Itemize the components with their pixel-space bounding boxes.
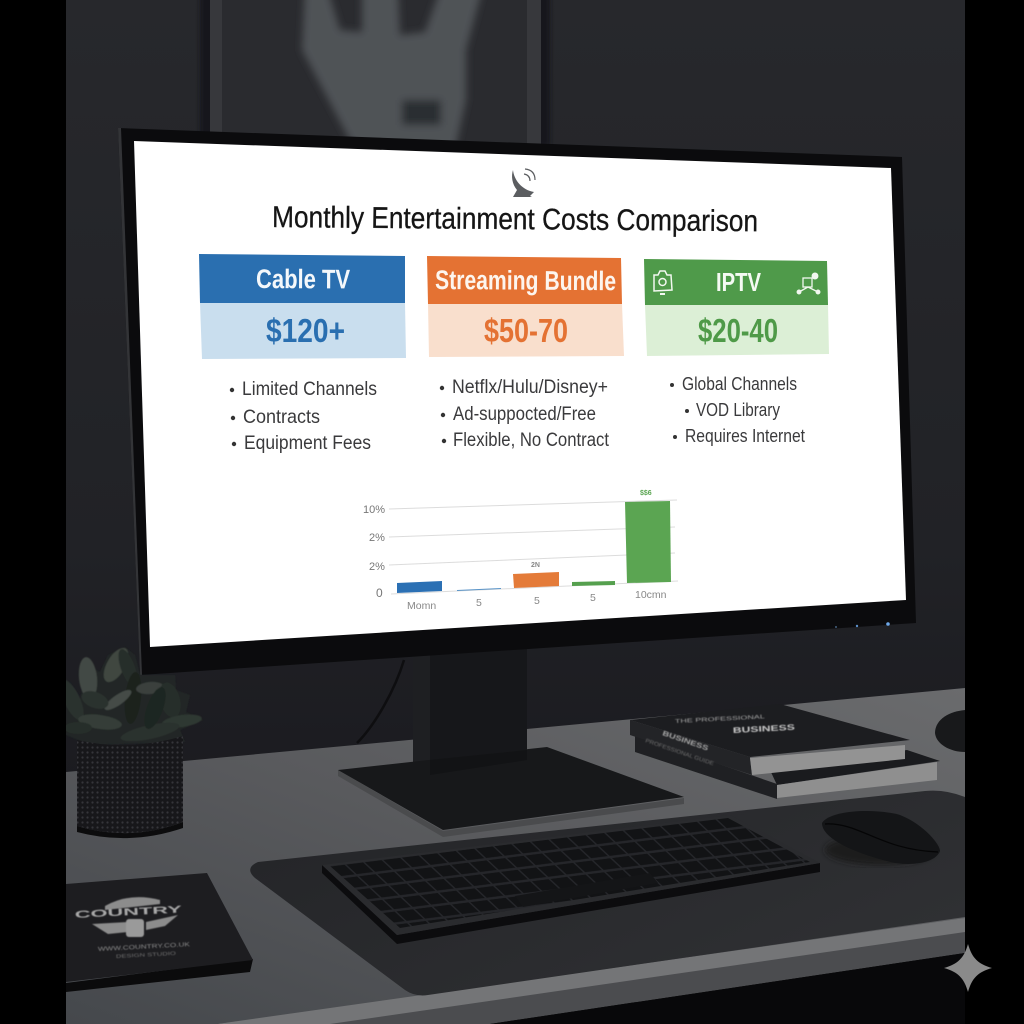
chart x-axis labels: 5 xyxy=(534,595,540,607)
Cable TV price: $120+ xyxy=(266,312,345,349)
book cover text xyxy=(644,714,796,767)
chart y-axis labels: 2% xyxy=(369,532,385,544)
chart y-axis labels: 0 xyxy=(376,586,383,600)
bar chart xyxy=(363,490,678,612)
notebook logo: COUNTRY xyxy=(75,904,183,921)
cable behind monitor xyxy=(357,660,404,743)
chart y-axis labels: 10% xyxy=(363,504,385,516)
right black margin xyxy=(965,0,1024,1024)
monitor bezel xyxy=(118,128,916,675)
second mouse on desk xyxy=(935,710,965,752)
Streaming Bundle price: $50-70 xyxy=(484,312,568,349)
desk front edge xyxy=(217,918,965,1024)
monitor stand xyxy=(338,645,684,837)
room background: dark wall xyxy=(66,0,965,780)
Cable TV price band xyxy=(200,303,406,359)
panel: IPTV xyxy=(644,259,829,356)
icon: camera xyxy=(654,271,672,294)
keyboard edge xyxy=(322,863,820,944)
Cable TV feature list: Equipment Fees xyxy=(244,432,371,454)
IPTV price band xyxy=(645,305,829,356)
notebook xyxy=(66,873,253,992)
Streaming Bundle heading: Streaming Bundle xyxy=(435,265,616,296)
notebook logo: WWW.COUNTRY.CO.UK xyxy=(98,942,190,953)
mouse xyxy=(822,811,940,865)
IPTV feature list: Requires Internet xyxy=(685,426,805,446)
notebook logo xyxy=(75,897,190,960)
upper book cover xyxy=(630,704,910,757)
chart value labels: $$6 xyxy=(640,490,652,497)
chart y-axis labels: 2% xyxy=(369,561,385,573)
icon: network device xyxy=(797,273,820,294)
keyboard xyxy=(322,815,820,944)
panel: Streaming Bundle xyxy=(427,256,624,357)
monitor screen xyxy=(134,141,906,647)
poster frame on wall xyxy=(200,0,550,150)
book cover text: BUSINESS xyxy=(661,730,709,753)
chart value labels: 2N xyxy=(531,562,540,569)
desk mat xyxy=(250,791,965,995)
panel: Cable TV xyxy=(199,254,406,359)
lower book spine xyxy=(635,735,777,799)
upper book spine xyxy=(630,720,752,775)
IPTV feature list: Global Channels xyxy=(682,374,797,394)
chart x-axis labels xyxy=(407,589,667,612)
book cover text: PROFESSIONAL GUIDE xyxy=(644,738,715,767)
IPTV price: $20-40 xyxy=(698,312,778,349)
plant xyxy=(55,644,203,838)
chart x-axis labels: 5 xyxy=(590,592,596,604)
icon: sparkle watermark xyxy=(944,944,992,992)
desk surface xyxy=(66,688,965,1024)
chart grid lines xyxy=(389,500,678,594)
plant leaves xyxy=(55,644,203,745)
book cover text: BUSINESS xyxy=(733,723,796,735)
stand neck xyxy=(413,645,527,775)
chart value labels xyxy=(531,490,652,569)
pot rim xyxy=(77,822,183,838)
chart x-axis labels: 10cmn xyxy=(635,589,667,601)
space bar xyxy=(515,873,658,907)
lower book cover xyxy=(770,750,940,785)
book cover text: THE PROFESSIONAL xyxy=(675,714,765,725)
IPTV header xyxy=(644,259,828,305)
desk underside shadow xyxy=(490,953,965,1024)
chart bars xyxy=(397,501,671,593)
notebook logo: DESIGN STUDIO xyxy=(116,951,176,960)
Streaming Bundle price band xyxy=(428,304,624,357)
IPTV heading: IPTV xyxy=(716,267,762,297)
icon: satellite dish xyxy=(512,169,535,197)
upper book pages xyxy=(750,745,905,775)
Streaming Bundle feature list xyxy=(440,377,610,451)
monitor xyxy=(118,128,916,675)
IPTV feature list: VOD Library xyxy=(696,400,780,420)
Cable TV feature list: Contracts xyxy=(243,406,320,428)
Streaming Bundle header xyxy=(427,256,622,304)
keyboard keys xyxy=(330,818,810,928)
IPTV feature list xyxy=(670,374,805,446)
lower book pages xyxy=(777,762,937,798)
stand base xyxy=(338,770,684,837)
Cable TV feature list xyxy=(230,378,377,454)
Streaming Bundle feature list: Flexible, No Contract xyxy=(453,430,610,451)
chart x-axis labels: 5 xyxy=(476,597,482,609)
stacked books xyxy=(630,704,940,799)
title: Monthly Entertainment Costs Comparison xyxy=(272,201,758,238)
monitor status lights xyxy=(835,622,890,628)
Cable TV heading: Cable TV xyxy=(256,264,350,294)
chart x-axis labels: Momn xyxy=(407,600,436,612)
Streaming Bundle feature list: Netflx/Hulu/Disney+ xyxy=(452,377,608,398)
Streaming Bundle feature list: Ad-suppocted/Free xyxy=(453,404,596,425)
Cable TV header xyxy=(199,254,405,303)
mesh pot xyxy=(77,736,183,833)
Cable TV feature list: Limited Channels xyxy=(242,378,377,400)
chart y-axis labels xyxy=(363,504,385,600)
left black margin xyxy=(0,0,66,1024)
